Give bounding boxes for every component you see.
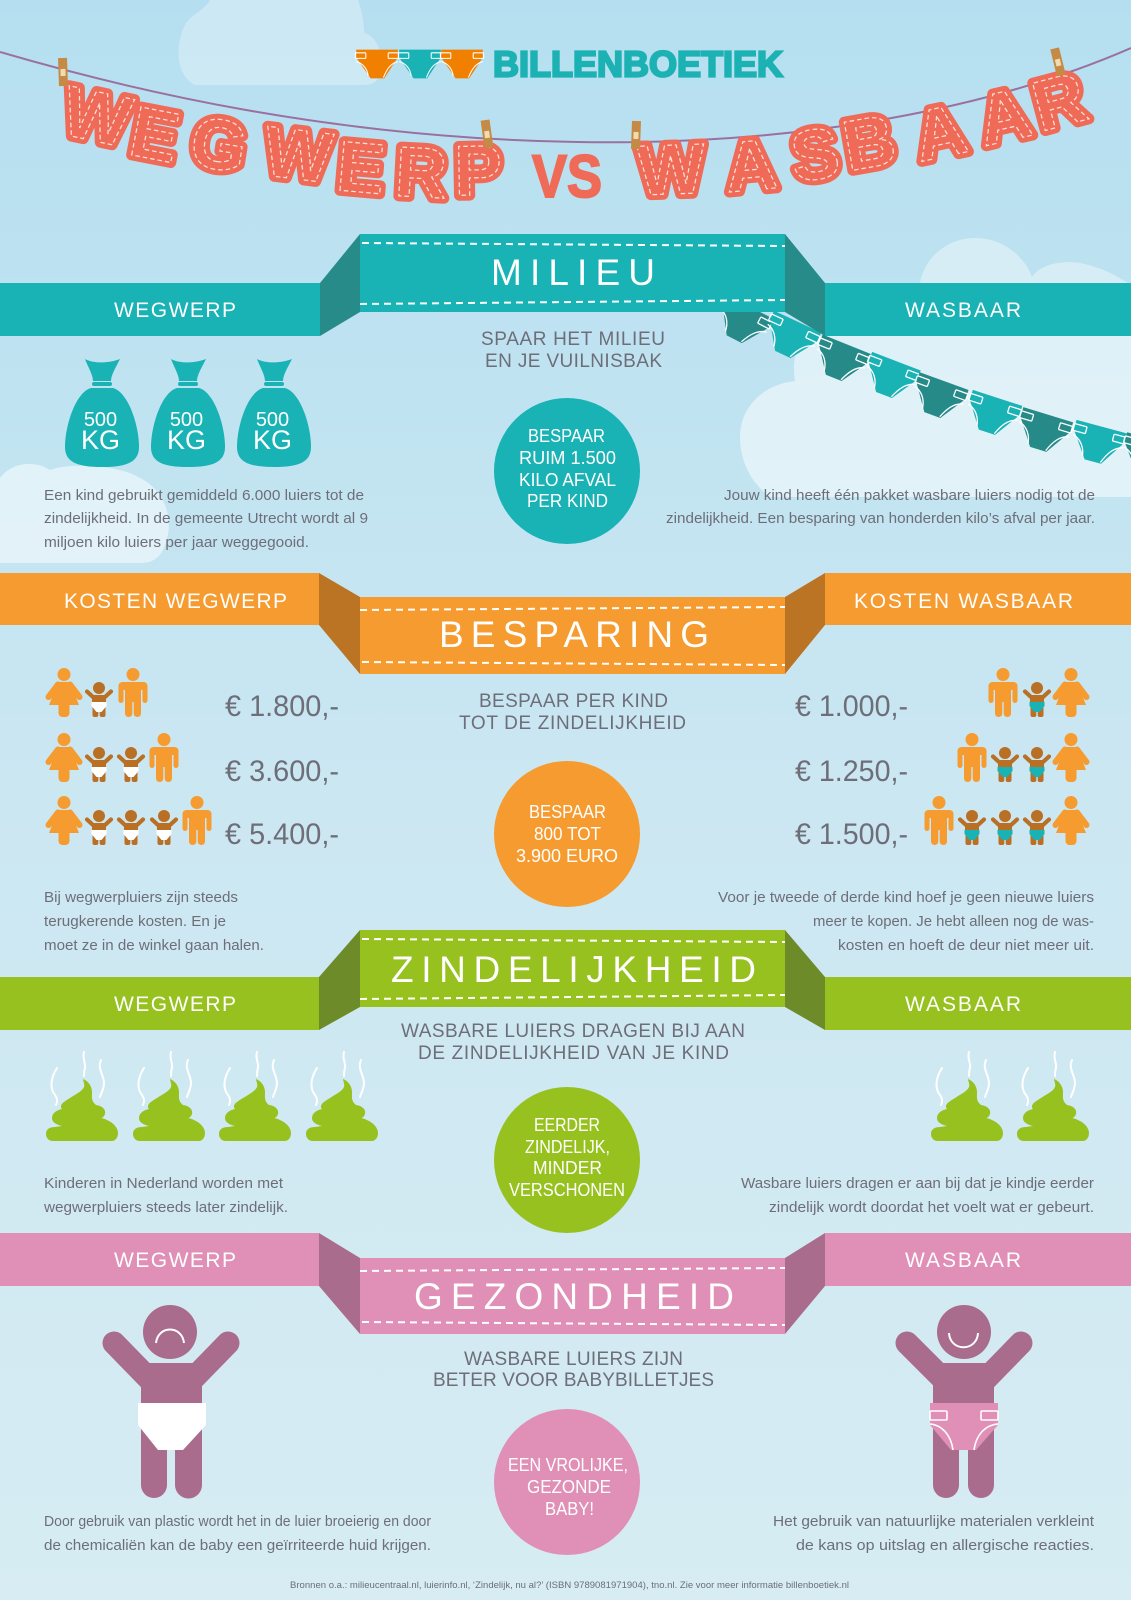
title: wasbaar: S — [786, 113, 844, 198]
title: wegwerp: P — [454, 132, 502, 211]
besparing text left: Bij wegwerpluiers zijn steeds — [44, 889, 238, 906]
icon: bags of waste: KG — [253, 425, 292, 455]
besparing circle callout: 3.900 EURO — [516, 845, 618, 866]
heading: besparing: BESPARING — [439, 614, 709, 655]
milieu circle callout: PER KIND — [527, 490, 608, 511]
milieu circle callout: RUIM 1.500 — [519, 447, 616, 468]
zindelijkheid circle callout: ZINDELIJK, — [525, 1136, 610, 1157]
prices wegwerp: € 1.800,- — [225, 690, 339, 723]
title: wasbaar — [636, 58, 1094, 211]
milieu subtitle — [481, 329, 665, 372]
diaper garland — [710, 295, 1131, 480]
title: wegwerp: E — [334, 127, 388, 210]
footer sources: Bronnen o.a.: milieucentraal.nl, luierinfo.nl, ‘Zindelijk, nu al?’ (ISBN 9789081971904), tno.nl. Zie voor meer informatie billenboetiek.nl — [290, 1580, 849, 1591]
title: wasbaar: W — [636, 130, 706, 211]
title: wegwerp: E — [334, 127, 388, 210]
heading: milieu: MILIEU — [491, 252, 655, 293]
milieu text right: Jouw kind heeft één pakket wasbare luiers nodig tot de — [724, 487, 1095, 504]
title: wasbaar: S — [786, 113, 844, 198]
milieu subtitle: SPAAR HET MILIEU — [481, 329, 665, 350]
prices wasbaar: € 1.000,- — [795, 690, 908, 723]
title: wasbaar: A — [722, 125, 780, 208]
prices wasbaar — [795, 690, 908, 851]
title: wegwerp: W — [56, 72, 138, 163]
besparing text right — [718, 889, 1094, 954]
zindelijkheid text left — [43, 1175, 288, 1216]
besparing text right: kosten en hoeft de deur niet meer uit. — [838, 937, 1094, 954]
icon: bags of waste: KG — [167, 425, 206, 455]
title: wasbaar: B — [837, 100, 901, 187]
milieu text left — [44, 487, 368, 551]
prices wegwerp: € 5.400,- — [225, 818, 339, 851]
label: wasbaar: WASBAAR — [905, 993, 1021, 1016]
title: wegwerp: W — [56, 72, 138, 163]
clothesline — [0, 48, 1131, 142]
cloud: right large — [740, 336, 1131, 497]
zindelijkheid circle callout — [494, 1087, 640, 1233]
title: wasbaar: A — [907, 89, 974, 177]
zindelijkheid text right: zindelijk wordt doordat het voelt wat er gebeurt. — [769, 1199, 1094, 1216]
gezondheid text right: Het gebruik van natuurlijke materialen verkleint — [773, 1513, 1095, 1530]
title: wasbaar: A — [722, 125, 780, 208]
title: wasbaar: B — [837, 100, 901, 187]
zindelijkheid circle callout: MINDER — [533, 1157, 602, 1178]
title: wasbaar: A — [907, 89, 974, 177]
zindelijkheid text right — [741, 1175, 1094, 1216]
zindelijkheid text left: wegwerpluiers steeds later zindelijk. — [43, 1199, 288, 1216]
panel: besparing banner — [0, 573, 1131, 674]
panel: milieu banner — [0, 234, 1131, 336]
label: wegwerp: WEGWERP — [114, 993, 236, 1016]
besparing subtitle: BESPAAR PER KIND — [479, 691, 668, 712]
gezondheid subtitle: WASBARE LUIERS ZIJN — [464, 1349, 683, 1370]
icon: bags of waste: KG — [81, 425, 120, 455]
title: wegwerp: P — [454, 132, 502, 211]
title: wasbaar: A — [970, 73, 1038, 162]
label: kosten wasbaar: KOSTEN WASBAAR — [854, 590, 1073, 613]
prices wegwerp: € 3.600,- — [225, 755, 339, 788]
gezondheid circle callout: BABY! — [545, 1498, 594, 1519]
cloud: lower left — [0, 464, 169, 563]
besparing circle callout: BESPAAR — [529, 801, 606, 822]
besparing text left: terugkerende kosten. En je — [44, 913, 226, 930]
gezondheid subtitle: BETER VOOR BABYBILLETJES — [433, 1370, 714, 1391]
title: wasbaar: W — [636, 130, 706, 211]
label: wegwerp: WEGWERP — [114, 1249, 236, 1272]
besparing subtitle: TOT DE ZINDELIJKHEID — [459, 713, 686, 734]
besparing subtitle — [459, 691, 686, 734]
milieu text right: zindelijkheid. Een besparing van honderden kilo’s afval per jaar. — [666, 510, 1095, 527]
title: wegwerp — [56, 72, 502, 214]
title: wegwerp: R — [393, 133, 449, 214]
title: wegwerp: E — [124, 92, 185, 179]
title: wegwerp: G — [185, 102, 252, 189]
label: wegwerp: WEGWERP — [114, 299, 236, 322]
besparing text left: moet ze in de winkel gaan halen. — [44, 937, 264, 954]
gezondheid circle callout — [494, 1409, 640, 1555]
zindelijkheid subtitle: DE ZINDELIJKHEID VAN JE KIND — [418, 1043, 729, 1064]
icon: sad baby with white diaper — [114, 1305, 228, 1498]
zindelijkheid subtitle: WASBARE LUIERS DRAGEN BIJ AAN — [401, 1021, 745, 1042]
icon: happy baby with pink diaper — [907, 1305, 1021, 1498]
gezondheid text left: de chemicaliën kan de baby een geïrriteerde huid krijgen. — [44, 1537, 431, 1554]
title: wegwerp: E — [124, 92, 185, 179]
prices wasbaar: € 1.500,- — [795, 818, 908, 851]
title: wasbaar: R — [1024, 58, 1094, 147]
title: wegwerp: W — [260, 112, 336, 199]
title: wasbaar: R — [1024, 58, 1094, 147]
zindelijkheid text left: Kinderen in Nederland worden met — [44, 1175, 284, 1192]
besparing circle callout — [494, 761, 640, 907]
zindelijkheid subtitle — [401, 1021, 745, 1064]
besparing text right: meer te kopen. Je hebt alleen nog de was- — [813, 913, 1094, 930]
label: wasbaar: WASBAAR — [905, 1249, 1021, 1272]
gezondheid text left — [44, 1513, 431, 1554]
icon: bags of waste: 500 — [170, 409, 203, 431]
gezondheid circle callout: GEZONDE — [527, 1476, 611, 1497]
milieu text left: miljoen kilo luiers per jaar weggegooid. — [44, 534, 309, 551]
heading: zindelijkheid: ZINDELIJKHEID — [391, 949, 756, 990]
besparing text left — [44, 889, 264, 954]
milieu circle callout — [494, 398, 640, 544]
title: wegwerp: R — [393, 133, 449, 214]
gezondheid text right: de kans op uitslag en allergische reacties. — [796, 1537, 1094, 1554]
icon: bags of waste: 500 — [256, 409, 289, 431]
icon: bags of waste: 500 — [84, 409, 117, 431]
milieu text left: Een kind gebruikt gemiddeld 6.000 luiers tot de — [44, 487, 364, 504]
zindelijkheid circle callout: VERSCHONEN — [509, 1179, 625, 1200]
gezondheid circle callout: EEN VROLIJKE, — [508, 1454, 628, 1475]
panel: zindelijkheid banner — [0, 930, 1131, 1030]
besparing circle callout: 800 TOT — [534, 823, 601, 844]
logo: BILLENBOETIEK — [493, 44, 783, 84]
gezondheid text left: Door gebruik van plastic wordt het in de luier broeierig en door — [44, 1513, 431, 1530]
prices wasbaar: € 1.250,- — [795, 755, 908, 788]
title: wegwerp: G — [185, 102, 252, 189]
icon: bags of waste — [65, 359, 311, 467]
cloud: right top — [920, 238, 1131, 290]
icons: poop wegwerp — [46, 1052, 378, 1141]
gezondheid subtitle — [433, 1349, 714, 1391]
icons: families wegwerp — [48, 668, 212, 845]
icons: families wasbaar — [924, 668, 1086, 845]
milieu circle callout: KILO AFVAL — [519, 469, 616, 490]
milieu circle callout: BESPAAR — [528, 425, 605, 446]
cloud: top — [178, 0, 382, 85]
label: kosten wegwerp: KOSTEN WEGWERP — [64, 590, 287, 613]
title: wegwerp: W — [260, 112, 336, 199]
logo — [355, 44, 783, 84]
label: wasbaar: WASBAAR — [905, 299, 1021, 322]
title: vs: VS — [532, 143, 602, 210]
heading: gezondheid: GEZONDHEID — [414, 1276, 734, 1317]
clothes pins — [58, 47, 1066, 149]
zindelijkheid text right: Wasbare luiers dragen er aan bij dat je kindje eerder — [741, 1175, 1094, 1192]
milieu text left: zindelijkheid. In de gemeente Utrecht wordt al 9 — [44, 510, 368, 527]
panel: gezondheid banner — [0, 1233, 1131, 1334]
gezondheid text right — [773, 1513, 1095, 1554]
title: wasbaar: A — [970, 73, 1038, 162]
prices wegwerp — [225, 690, 339, 851]
besparing text right: Voor je tweede of derde kind hoef je geen nieuwe luiers — [718, 889, 1094, 906]
milieu text right — [666, 487, 1095, 527]
milieu subtitle: EN JE VUILNISBAK — [485, 351, 662, 372]
icons: poop wasbaar — [931, 1052, 1089, 1141]
zindelijkheid circle callout: EERDER — [534, 1114, 600, 1135]
